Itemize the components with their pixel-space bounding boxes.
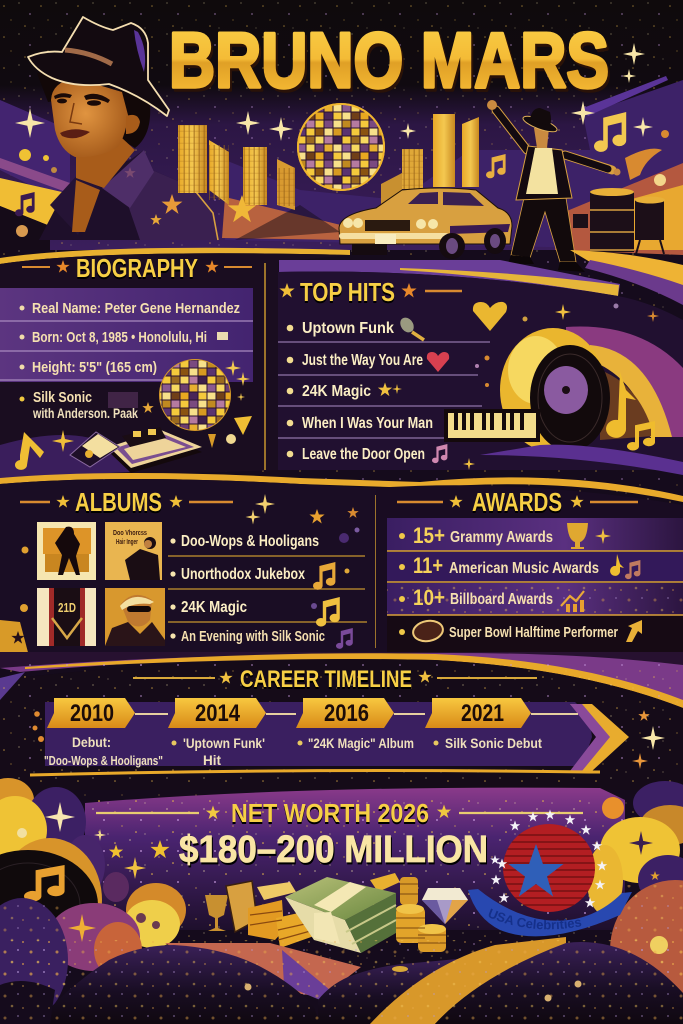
album cover: Unorthodox Jukebox: Hair Inger [116, 537, 138, 546]
award row: American Music: 11+ [413, 553, 443, 578]
album cover: 24K Magic [37, 588, 96, 646]
panel: albums [0, 479, 376, 668]
award row: Billboard: 10+ [413, 585, 445, 610]
silk sonic note: with Anderson. Paak [32, 405, 138, 421]
milestone 2016 [296, 698, 414, 751]
disco ball [297, 103, 385, 191]
award row: Super Bowl [387, 616, 683, 652]
net worth amount: $180–200 MILLION [179, 829, 488, 871]
heading: top hits [279, 277, 462, 307]
left balloons and vinyl [0, 778, 186, 1022]
milestone 2014: 2014 [195, 700, 241, 727]
heading: biography: BIOGRAPHY [76, 253, 198, 283]
gold sweep above timeline [0, 652, 683, 790]
heading: net worth [96, 798, 583, 828]
right balloons [587, 781, 683, 1020]
USA Celebrities logo: USA Celebrities [488, 908, 582, 930]
heading: career timeline: CAREER TIMELINE [240, 666, 412, 693]
heading: albums [20, 487, 233, 517]
panel background [376, 485, 683, 652]
top hits list: When I Was Your Man [302, 415, 433, 432]
milestone 2021: 2021 [461, 700, 504, 727]
hat [28, 17, 169, 116]
milestone 2021: Silk Sonic Debut [445, 735, 542, 751]
award row: Billboard: Billboard Awards [450, 591, 553, 608]
lower right streak [480, 445, 683, 475]
panel: awards [376, 485, 683, 652]
timeline sparkles [32, 710, 665, 769]
award row: Grammy: 15+ [413, 523, 445, 548]
panel background [278, 272, 683, 470]
retro music gear [0, 416, 252, 478]
album cover: Silk Sonic [105, 588, 165, 646]
header backdrop streaks [0, 76, 683, 255]
top hits list: Just the Way You Are [302, 352, 423, 369]
albums list: An Evening with Silk Sonic [181, 628, 325, 645]
milestone 2014 [168, 698, 266, 768]
gold sweep between sections [0, 473, 683, 502]
cash bundles [285, 897, 361, 953]
heading: biography [22, 253, 252, 283]
top hits list: 24K Magic [302, 383, 371, 400]
vinyl record [500, 327, 683, 452]
icon: microphone [397, 315, 424, 340]
icon: red heart [427, 352, 449, 372]
biography facts panel: Born: Oct 8, 1985 • Honolulu, Hi [32, 329, 207, 346]
header sparkles [15, 43, 669, 237]
milestone 2010: 2010 [70, 700, 114, 727]
diamond [422, 888, 468, 924]
hair back [37, 72, 150, 148]
panel: biography [0, 253, 253, 478]
album cover: 24K Magic: 21D [58, 600, 76, 615]
panel background [0, 479, 376, 652]
album list icons [246, 494, 360, 649]
timeline [30, 698, 665, 775]
biography facts panel: Height: 5'5" (165 cm) [32, 359, 157, 376]
award row: Super Bowl: Super Bowl Halftime Performer [449, 624, 618, 641]
albums list: Doo-Wops & Hooligans [181, 533, 319, 550]
milestone 2014: Hit [203, 752, 221, 768]
silk sonic note [20, 389, 154, 421]
face [51, 78, 128, 157]
icon: pink note [432, 444, 447, 463]
milestone 2014: 'Uptown Funk' [183, 735, 265, 751]
section divider [264, 263, 266, 470]
sparkle dots [463, 304, 659, 470]
award row: American Music: American Music Awards [449, 560, 599, 577]
biography facts panel: Real Name: Peter Gene Hernandez [32, 300, 240, 317]
neck [76, 138, 135, 188]
albums list [168, 533, 367, 645]
milestone 2016: 2016 [324, 700, 369, 727]
timeline arrow band [30, 702, 629, 775]
top hits list: Uptown Funk [302, 320, 394, 337]
drum barrels [573, 188, 665, 254]
album cover: Unorthodox Jukebox [105, 522, 162, 580]
left gold corner [0, 546, 30, 668]
dancer [487, 100, 620, 272]
gold sweep under header [0, 248, 683, 480]
net worth stars [94, 829, 170, 879]
milestone 2016: "24K Magic" Album [308, 735, 414, 751]
award row: Billboard [387, 583, 683, 615]
milestone 2010 [44, 698, 163, 768]
icon: gold heart [473, 302, 507, 331]
panel: top hits [278, 272, 683, 475]
card [226, 881, 257, 932]
biography facts panel [0, 288, 253, 382]
gold bars [257, 882, 296, 900]
disco ball small [159, 359, 250, 431]
award row: American Music [387, 552, 683, 582]
milestone 2021 [425, 698, 542, 751]
icon: gold notes [606, 372, 655, 451]
heading: awards: AWARDS [472, 487, 562, 517]
albums list: 24K Magic [181, 599, 247, 616]
bottom hills [0, 937, 683, 1024]
heading: awards [397, 487, 638, 517]
wine glass [205, 895, 228, 931]
award row: Grammy: Grammy Awards [450, 529, 553, 546]
heading: albums: ALBUMS [75, 487, 162, 517]
city skyline [178, 114, 479, 210]
portrait of Bruno Mars [28, 17, 218, 240]
milestone 2010: "Doo-Wops & Hooligans" [44, 753, 163, 768]
coin stacks [400, 877, 418, 905]
USA Celebrities logo [468, 810, 632, 936]
album cover: Doo-Wops [37, 522, 96, 580]
milestone 2010: Debut: [72, 734, 111, 750]
albums list: Unorthodox Jukebox [181, 566, 305, 583]
award row: Grammy [387, 518, 683, 551]
icon: keyboard [444, 409, 540, 442]
album cover: Unorthodox Jukebox: Doo Vhorcss [113, 528, 147, 537]
money pile [205, 873, 468, 953]
falling star and note decorations [15, 112, 662, 222]
top hits list: Leave the Door Open [302, 446, 425, 463]
top hits list [278, 320, 490, 463]
heading: career timeline [133, 666, 537, 693]
silk sonic note: Silk Sonic [33, 389, 92, 406]
heading: net worth: NET WORTH 2026 [231, 798, 429, 828]
icon: sparkles [378, 382, 402, 396]
heading: top hits: TOP HITS [300, 277, 395, 307]
shirt [39, 150, 218, 240]
section divider [375, 495, 377, 648]
car [339, 188, 512, 259]
panel: net worth backdrop [85, 788, 625, 930]
